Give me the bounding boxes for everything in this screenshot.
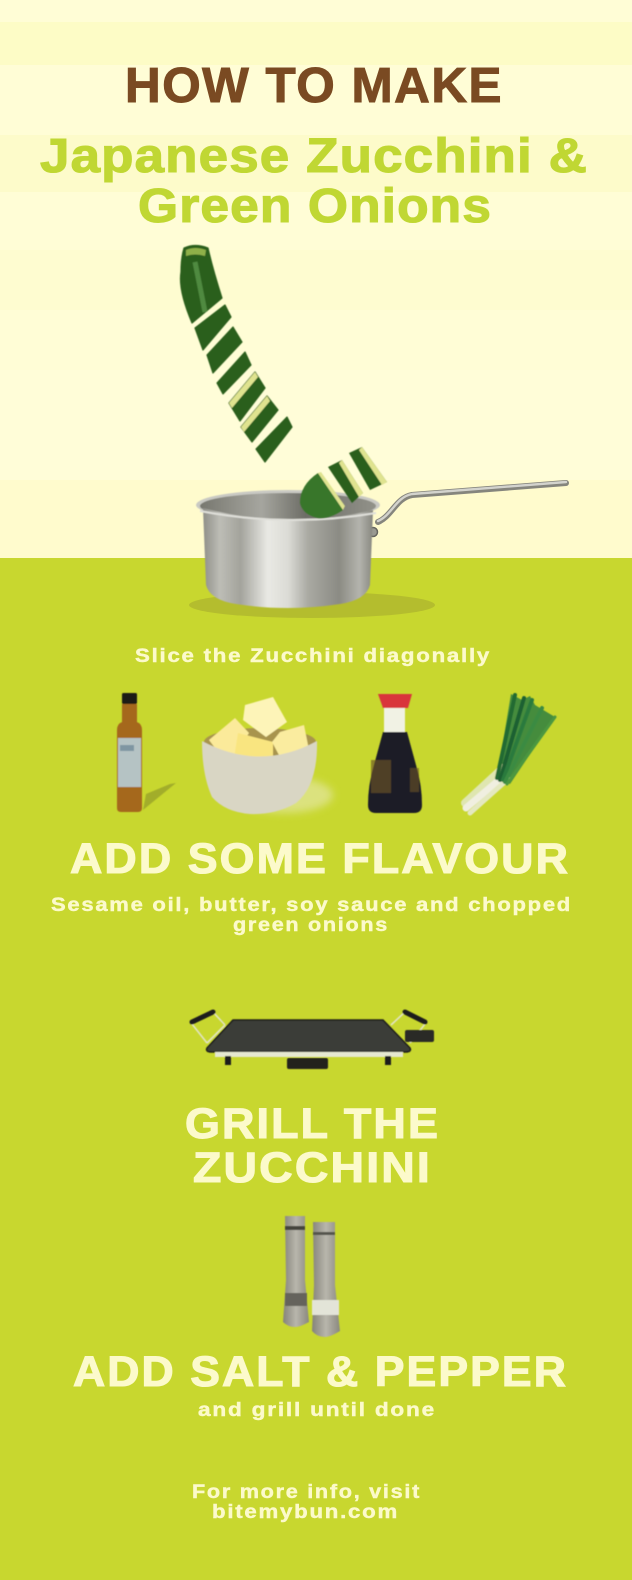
text: flavour ingredients xyxy=(51,895,572,936)
text: grill until done: and grill until done xyxy=(198,1400,436,1421)
illustration: saucepan xyxy=(196,490,380,608)
icon: salt and pepper mills xyxy=(283,1216,340,1337)
text: source credit: bitemybun.com xyxy=(212,1502,399,1523)
heading: recipe name xyxy=(40,130,588,233)
text: flavour ingredients: Sesame oil, butter, soy sauce and chopped xyxy=(51,895,572,916)
icon: soy sauce bottle xyxy=(368,694,422,813)
heading: grill the zucchini: ZUCCHINI xyxy=(193,1144,432,1192)
illustration: zucchini pieces in pan xyxy=(300,447,387,518)
icon: bowl of butter xyxy=(202,697,333,814)
icon: electric griddle xyxy=(192,1012,434,1069)
illustration: saucepan handle xyxy=(368,482,566,536)
text: source credit xyxy=(192,1482,421,1523)
icon: green onions xyxy=(465,694,555,813)
heading: recipe name: Green Onions xyxy=(138,180,492,233)
heading: grill the zucchini: GRILL THE xyxy=(185,1100,440,1148)
caption: slice the zucchini: Slice the Zucchini diagonally xyxy=(135,646,491,667)
illustration: pan shadow xyxy=(189,592,435,618)
illustration: sliced zucchini falling xyxy=(180,246,292,462)
cream upper background xyxy=(0,0,632,558)
heading: how to make: HOW TO MAKE xyxy=(125,59,503,113)
icon: sesame oil bottle xyxy=(117,693,176,812)
green lower background xyxy=(0,558,632,1580)
text: source credit: For more info, visit xyxy=(192,1482,421,1503)
heading: grill the zucchini xyxy=(185,1100,440,1192)
heading: add some flavour: ADD SOME FLAVOUR xyxy=(70,835,570,883)
text: flavour ingredients: green onions xyxy=(233,915,389,936)
heading: add salt and pepper: ADD SALT & PEPPER xyxy=(73,1348,568,1396)
heading: recipe name: Japanese Zucchini & xyxy=(40,130,588,183)
